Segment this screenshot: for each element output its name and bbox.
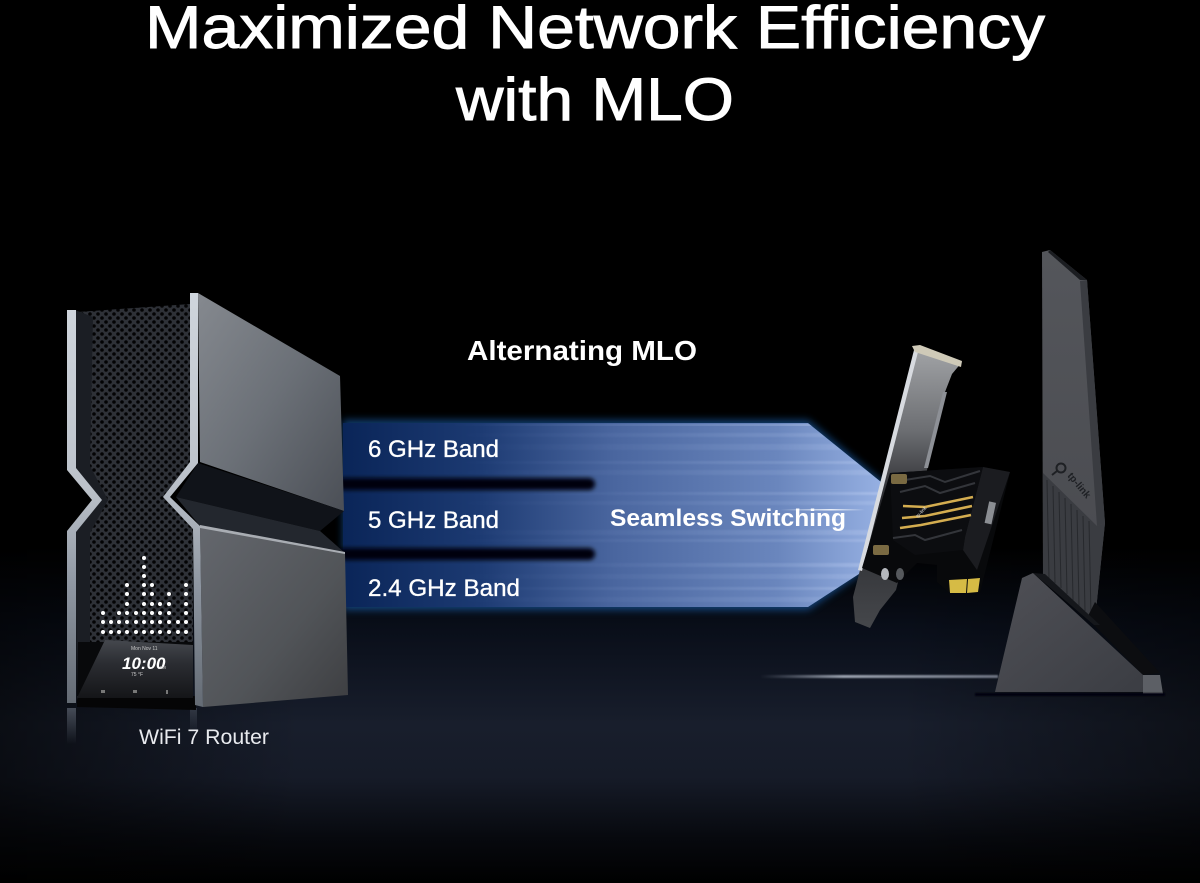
router lower panel highlight: [200, 525, 345, 554]
heading: Alternating MLO: Alternating MLO: [467, 335, 697, 366]
router mesh front: [78, 304, 193, 642]
label: Seamless Switching: Seamless Switching: [610, 505, 846, 532]
antenna right facet: [1080, 280, 1105, 526]
icon: WiFi 7 router: [67, 293, 348, 744]
router touch screen: 75 °F: [131, 672, 143, 678]
router base shadow: [77, 696, 196, 710]
bracket top flange: [912, 345, 962, 367]
antenna top edge: [1048, 250, 1087, 280]
antenna ribbed lower section: [1043, 473, 1105, 620]
router left rail: [67, 310, 102, 703]
label: WiFi 7 Router: WiFi 7 Router: [139, 726, 269, 749]
antenna blade: [1042, 250, 1105, 620]
router reflection: [67, 708, 197, 744]
icon: PCIe adapter card: [853, 345, 1010, 628]
antenna logo: tp-link: [1065, 471, 1093, 501]
router touch screen: 10:00: [122, 654, 166, 673]
router touch screen: [77, 640, 193, 698]
title: [145, 0, 1045, 133]
heatsink side panel: [963, 467, 1010, 570]
router centre rail: [163, 293, 203, 707]
card mark: [985, 501, 996, 524]
bracket slots: [881, 568, 904, 580]
antenna ribs: [1047, 480, 1091, 616]
floor highlight line: [760, 675, 998, 678]
bracket bright edge: [858, 350, 918, 571]
base slot edge: [1033, 573, 1100, 625]
label: 2.4 GHz Band: 2.4 GHz Band: [368, 575, 520, 602]
router LED equalizer: [101, 556, 188, 634]
card logo: tp-link: [915, 505, 929, 519]
bracket inner fold: [924, 392, 947, 468]
antenna connector top: [891, 474, 907, 484]
base right block: [1143, 675, 1163, 694]
card bracket: [853, 346, 962, 628]
label: 6 GHz Band: 6 GHz Band: [368, 436, 499, 463]
title: with MLO: [455, 66, 734, 133]
router lower panel: [200, 526, 348, 707]
router left inner wall: [75, 310, 108, 700]
antenna base: [995, 573, 1143, 692]
heatsink top face: [890, 467, 983, 555]
band arrow: [335, 420, 888, 610]
router upper panel: [198, 293, 344, 511]
gold PCIe contacts: [949, 578, 980, 593]
gold heat pipes: [900, 497, 973, 528]
router dark notch: [176, 463, 344, 531]
antenna connector bottom: [873, 545, 889, 555]
heatsink ridges: [893, 471, 980, 540]
circuit board: [862, 467, 1010, 593]
router lower notch slope: [176, 497, 345, 553]
label: 5 GHz Band: 5 GHz Band: [368, 507, 499, 534]
icon: antenna stand: [975, 250, 1165, 696]
router touch screen: Mon Nov 11: [131, 646, 158, 652]
antenna base rear rim: [1087, 602, 1160, 675]
router touch screen: AM: [159, 665, 166, 670]
antenna logo: [1052, 464, 1093, 501]
base shadow: [975, 693, 1165, 696]
